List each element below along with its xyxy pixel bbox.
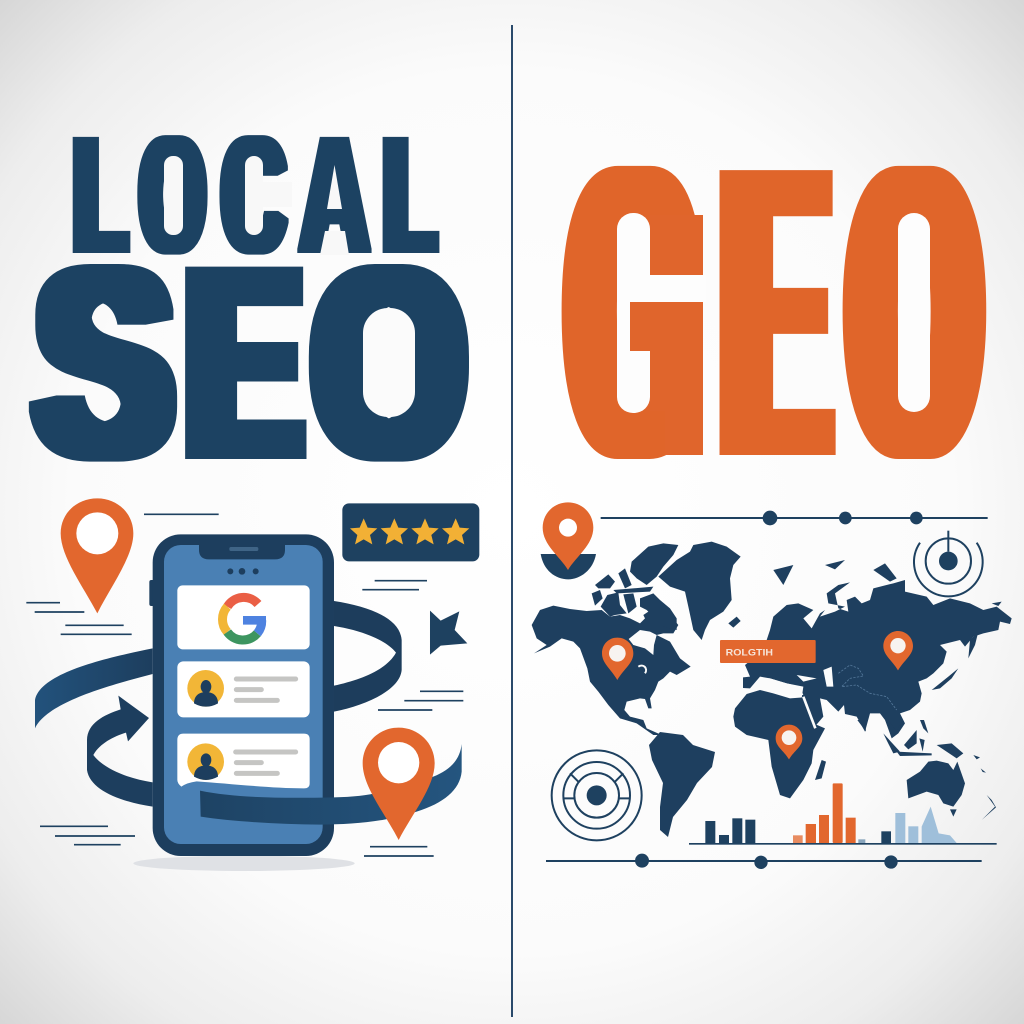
title: LOCAL	[74, 103, 435, 286]
world map	[532, 542, 1012, 837]
bar chart	[689, 783, 997, 845]
map pin: lower right	[363, 728, 435, 840]
card: Google	[177, 585, 310, 649]
Madagascar	[815, 760, 826, 780]
Australia and Southeast Asia	[857, 720, 996, 820]
title: SEO: O	[315, 215, 463, 511]
North America, Arctic and Greenland	[532, 542, 741, 735]
title: SEO	[37, 215, 463, 511]
title: SEO: E	[188, 215, 299, 511]
interior borders	[838, 665, 897, 710]
phone shadow	[133, 856, 355, 871]
pin: North America	[602, 638, 633, 680]
Black Sea, Caspian and Mediterranean	[750, 667, 833, 695]
timeline: bottom	[546, 854, 982, 869]
map pin: upper left	[61, 498, 133, 613]
pin: Africa	[776, 725, 802, 759]
ribbon behind phone	[35, 601, 402, 728]
title: LOCAL: O	[141, 103, 204, 286]
Tasmania and New Zealand	[950, 795, 996, 820]
illustration: GEO extras	[541, 502, 997, 869]
title: LOCAL: L	[74, 103, 126, 286]
radar: bottom left	[552, 750, 642, 840]
Australia	[907, 761, 965, 807]
Africa and Madagascar	[733, 690, 826, 798]
map label	[720, 640, 816, 663]
Arctic islands	[592, 543, 678, 630]
card: review 1	[177, 661, 310, 717]
pin: Asia	[883, 631, 913, 670]
title: LOCAL: L	[384, 103, 435, 286]
Iceland	[728, 617, 741, 628]
Africa	[733, 690, 825, 798]
Eurasia and Asian islands	[743, 560, 1012, 738]
curved arrow	[87, 696, 153, 807]
phone	[149, 534, 334, 856]
South America	[649, 732, 715, 837]
title: LOCAL: A	[302, 103, 367, 286]
illustration: local SEO phone	[26, 498, 479, 871]
title: GEO: E	[726, 80, 826, 543]
card: review 2	[177, 734, 310, 788]
timeline: top	[601, 511, 988, 525]
islands	[773, 560, 1002, 690]
pin with base	[541, 502, 596, 579]
Hudson Bay	[629, 630, 657, 655]
Eurasia	[743, 580, 1012, 738]
title: LOCAL: C	[223, 103, 284, 286]
map label: ROLGTIH	[726, 648, 773, 658]
icon: star arrow	[430, 611, 467, 655]
icon: Google G	[222, 597, 266, 640]
title: SEO: S	[37, 215, 171, 511]
Southeast Asia islands	[857, 720, 986, 773]
front ribbon	[200, 744, 462, 825]
rating badge	[342, 503, 479, 561]
Red Sea	[803, 697, 815, 728]
radar: top right	[914, 531, 983, 596]
divider line	[511, 25, 513, 1017]
Great Lakes	[638, 666, 646, 673]
motion lines	[26, 514, 463, 856]
title: GEO: G	[571, 80, 696, 543]
North America	[532, 606, 691, 735]
Greenland	[658, 542, 741, 640]
